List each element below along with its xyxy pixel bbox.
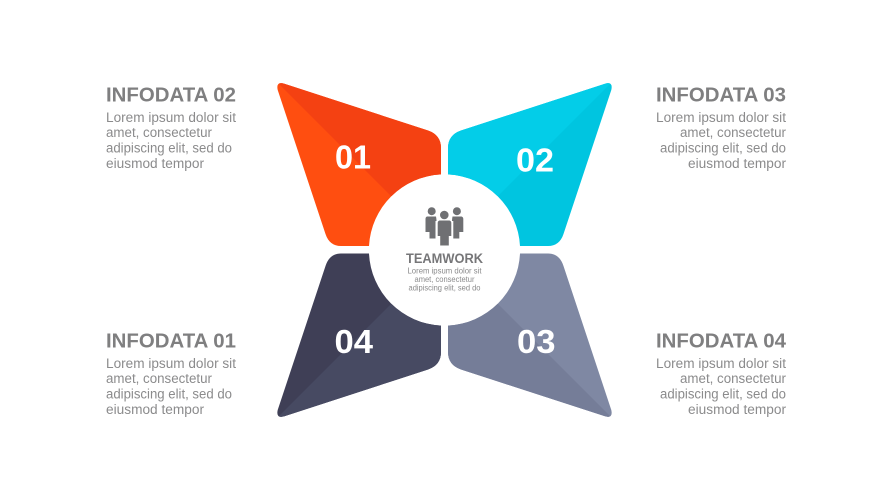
text block: infodata 01: Lorem ipsum dolor sit	[106, 356, 236, 371]
center text: Lorem ipsum dolor sit	[408, 265, 482, 275]
text block: infodata 03: eiusmod tempor	[688, 156, 787, 171]
text block: infodata 03: Lorem ipsum dolor sit	[656, 110, 786, 125]
text block: infodata 01: amet, consectetur	[106, 371, 212, 386]
text block: infodata 04: adipiscing elit, sed do	[660, 386, 786, 401]
text block: infodata 02: INFODATA 02	[106, 84, 236, 106]
text block: infodata 03	[656, 84, 787, 171]
text block: infodata 02: eiusmod tempor	[106, 156, 205, 171]
text block: infodata 04: amet, consectetur	[680, 371, 786, 386]
text block: infodata 02: amet, consectetur	[106, 125, 212, 140]
text block: infodata 04	[656, 330, 787, 417]
text block: infodata 04: Lorem ipsum dolor sit	[656, 356, 786, 371]
center heading: TEAMWORK	[406, 251, 483, 266]
text block: infodata 03: adipiscing elit, sed do	[660, 140, 786, 155]
infographic	[106, 83, 786, 417]
text block: infodata 02: adipiscing elit, sed do	[106, 140, 232, 155]
center text: adipiscing elit, sed do	[408, 283, 481, 293]
center text: amet, consectetur	[414, 274, 475, 284]
text block: infodata 02: Lorem ipsum dolor sit	[106, 110, 236, 125]
number 02: 02	[516, 142, 554, 178]
panel: petal 02	[448, 83, 612, 246]
number 01: 01	[335, 138, 371, 176]
text block: infodata 01: INFODATA 01	[106, 330, 236, 352]
text block: infodata 04: INFODATA 04	[656, 330, 787, 352]
number 03: 03	[517, 323, 556, 360]
text block: infodata 03: INFODATA 03	[656, 84, 786, 106]
text block: infodata 03: amet, consectetur	[680, 125, 786, 140]
panel: petal 01	[277, 83, 441, 246]
center text	[408, 265, 482, 293]
text block: infodata 01: eiusmod tempor	[106, 402, 205, 417]
text block: infodata 02	[106, 84, 236, 171]
panel: petal 03	[448, 254, 612, 417]
text block: infodata 01: adipiscing elit, sed do	[106, 386, 232, 401]
number 04: 04	[334, 323, 374, 360]
icon: team of three people	[426, 207, 463, 246]
panel: petal 04	[277, 254, 441, 417]
text block: infodata 04: eiusmod tempor	[688, 402, 787, 417]
text block: infodata 01	[106, 330, 236, 417]
